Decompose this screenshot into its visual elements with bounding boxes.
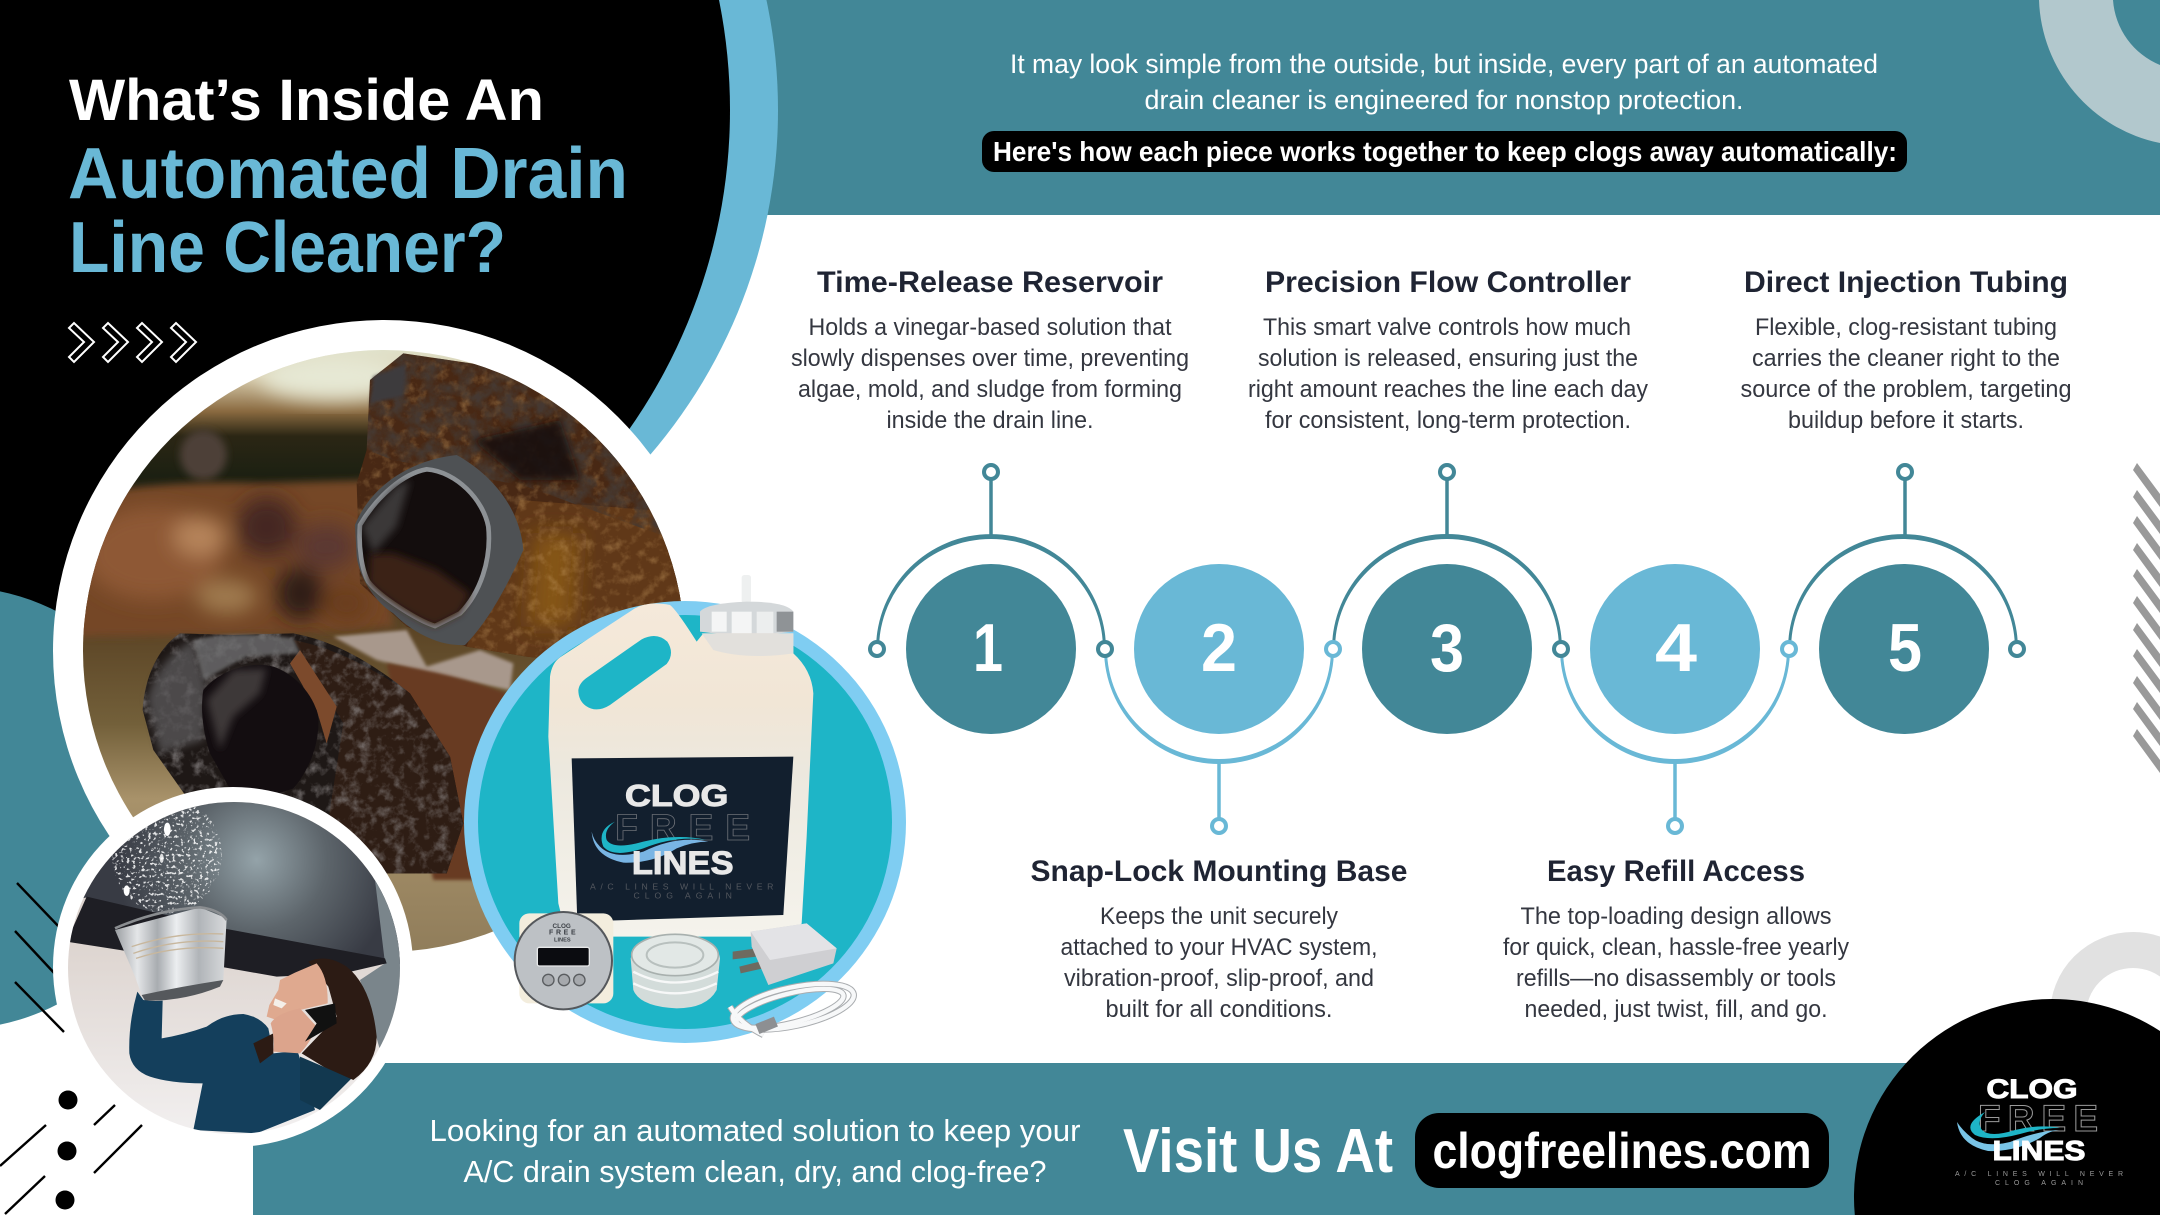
- jug body: [548, 604, 813, 937]
- step 5 node: 5: [1888, 610, 1922, 686]
- logo: Clog Free Lines: CLOG AGAIN: [1995, 1180, 2083, 1187]
- step 4 text: Easy Refill Access: [1503, 855, 1849, 1023]
- logo: Clog Free Lines: [1955, 1074, 2123, 1187]
- phone: [305, 1003, 337, 1042]
- intro line 2: drain cleaner is engineered for nonstop protection.: [1144, 85, 1744, 115]
- controller mount: [519, 913, 613, 1003]
- website pill: [1415, 1113, 1829, 1188]
- step 3 text: Precision Flow Controller: This smart valve controls how much: [1263, 314, 1631, 341]
- black logo circle: [1854, 999, 2160, 1215]
- step 4 text: Easy Refill Access: needed, just twist, fill, and go.: [1524, 996, 1828, 1023]
- question line 1: Looking for an automated solution to keep your: [430, 1113, 1080, 1148]
- intro highlight pill: Here's how each piece works together to keep clogs away automatically:: [993, 136, 1897, 167]
- junction dots: [870, 642, 2024, 656]
- question line 2: A/C drain system clean, dry, and clog-free?: [464, 1154, 1046, 1189]
- step 2 text: Snap-Lock Mounting Base: Keeps the unit securely: [1100, 903, 1338, 930]
- step 5 text: Direct Injection Tubing: source of the problem, targeting: [1740, 376, 2072, 403]
- adapter body: [751, 923, 837, 985]
- logo: Clog Free Lines: A/C LINES WILL NEVER: [1955, 1171, 2123, 1178]
- teal circle lower left: [0, 587, 177, 1029]
- slanted lines: [0, 1105, 142, 1214]
- controller dial: [515, 912, 612, 1009]
- product: solution jug with label: [548, 575, 813, 937]
- photo: rusted corroded pipes: [60, 340, 693, 960]
- smooth rear pipe: [386, 662, 506, 882]
- jug handle hole: [578, 636, 671, 709]
- controller logo: [549, 923, 576, 943]
- light blue arc behind black circle: [0, 0, 778, 639]
- lower pipe body: [143, 633, 463, 873]
- white ring of leak photo: [53, 787, 413, 1147]
- blurred horizontal pipe: [73, 480, 393, 637]
- step 3 text: Precision Flow Controller: Precision Flow Controller: [1265, 266, 1632, 299]
- step 1 text: Time-Release Reservoir: inside the drain line.: [886, 407, 1094, 434]
- step 4 text: Easy Refill Access: Easy Refill Access: [1547, 855, 1805, 888]
- logo: Clog Free Lines: FREE: [1978, 1098, 2098, 1139]
- upper pipe mouth: [355, 455, 523, 645]
- step 5 text: Direct Injection Tubing: carries the cleaner right to the: [1752, 345, 2060, 372]
- controller LCD: [537, 947, 589, 966]
- water droplets: [112, 797, 222, 913]
- step 3 node: 3: [1430, 610, 1464, 686]
- controller logo: FREE: [549, 930, 576, 937]
- step 2 text: Snap-Lock Mounting Base: built for all conditions.: [1106, 996, 1332, 1023]
- lower pipe mouth: [202, 665, 318, 807]
- title line 1: What’s Inside An: [69, 68, 544, 133]
- jug cap: [700, 602, 793, 635]
- title line 2: Automated Drain: [68, 134, 628, 214]
- step 4 text: Easy Refill Access: for quick, clean, hassle-free yearly: [1503, 934, 1849, 961]
- face: [267, 963, 328, 1020]
- step 5 text: Direct Injection Tubing: buildup before it starts.: [1788, 407, 2024, 434]
- decorative thin diagonal lines left: [15, 883, 64, 1032]
- bottom call-to-action band: [253, 1063, 2160, 1215]
- product: coil of clear tubing: [631, 933, 720, 1008]
- step 4 node: [1560, 564, 1790, 833]
- title line 3: Line Cleaner?: [69, 208, 506, 288]
- step 3 text: Precision Flow Controller: for consistent, long-term protection.: [1265, 407, 1631, 434]
- bottom-left dots and lines: [0, 1090, 142, 1214]
- step 2 text: Snap-Lock Mounting Base: vibration-proof, slip-proof, and: [1064, 965, 1374, 992]
- step 3 node: [1332, 465, 1562, 734]
- sleeve and sweater: [129, 992, 315, 1133]
- top intro text: [1010, 49, 1878, 115]
- upper pipe body: [357, 353, 693, 673]
- step 2 text: Snap-Lock Mounting Base: attached to your HVAC system,: [1060, 934, 1378, 961]
- hair: [302, 958, 377, 1080]
- jug logo: A/C LINES WILL NEVER: [590, 881, 773, 891]
- step 2 text: Snap-Lock Mounting Base: Snap-Lock Mounting Base: [1030, 855, 1408, 888]
- step 1 text: Time-Release Reservoir: algae, mold, and sludge from forming: [798, 376, 1182, 403]
- visit us at label: Visit Us At: [1123, 1117, 1393, 1186]
- white ring of pipes photo: [53, 320, 715, 982]
- beige patches between pipes: [333, 630, 513, 690]
- bucket: [115, 907, 227, 1000]
- bottom question text: [430, 1113, 1080, 1189]
- intro line 1: It may look simple from the outside, but inside, every part of an automated: [1010, 49, 1878, 79]
- jug logo: CLOG AGAIN: [633, 891, 732, 901]
- step 4 node: 4: [1655, 610, 1697, 686]
- product: USB power adapter: [733, 923, 837, 985]
- inner teal circle: [478, 615, 892, 1029]
- controller logo: LINES: [554, 937, 571, 943]
- logo: Clog Free Lines: LINES: [1992, 1135, 2086, 1166]
- step 2 node: [1104, 564, 1334, 833]
- jug logo: LINES: [632, 845, 733, 881]
- photo: woman catching ceiling leak with bucket: [68, 802, 400, 1134]
- icon: four outlined chevrons: [69, 323, 196, 362]
- adapter prongs: [733, 948, 763, 973]
- jug label: [572, 757, 793, 922]
- step 1 text: Time-Release Reservoir: slowly dispenses over time, preventing: [791, 345, 1189, 372]
- hand: [271, 1008, 317, 1053]
- jug logo: CLOG: [625, 779, 728, 813]
- decorative ring bottom right: [2068, 950, 2160, 1080]
- black title circle: [0, 0, 730, 666]
- logo: Clog Free Lines: CLOG: [1986, 1074, 2078, 1104]
- controller buttons: [543, 974, 585, 986]
- step 1 text: Time-Release Reservoir: Time-Release Reservoir: [817, 266, 1164, 299]
- outer light blue circle: [464, 601, 906, 1043]
- dots: [56, 1090, 78, 1210]
- step 5 text: Direct Injection Tubing: Direct Injection Tubing: [1744, 266, 2068, 299]
- step 2 node: 2: [1201, 610, 1237, 686]
- step diagram: numbered circles on a wave line: [870, 465, 2024, 833]
- title: [68, 68, 628, 288]
- jug logo: [590, 779, 773, 901]
- jug logo: FREE: [615, 806, 750, 848]
- product: digital controller: [515, 912, 613, 1009]
- top-right decorative ring: [2039, 0, 2160, 143]
- product: white USB cable: [729, 975, 858, 1038]
- top banner band: [700, 0, 2160, 215]
- product circle: [464, 601, 906, 1043]
- right side diagonal stripes: [2133, 463, 2160, 773]
- controller logo: CLOG: [553, 923, 571, 930]
- step 3 text: Precision Flow Controller: solution is released, ensuring just the: [1258, 345, 1638, 372]
- step 5 text: Direct Injection Tubing: Flexible, clog-resistant tubing: [1755, 314, 2057, 341]
- step 1 node: [876, 465, 1106, 734]
- step 5 node: [1788, 465, 2018, 734]
- step 1 node: 1: [973, 610, 1003, 686]
- step 3 text: Precision Flow Controller: [1248, 266, 1648, 434]
- website pill: clogfreelines.com: [1432, 1123, 1812, 1179]
- step 2 text: Snap-Lock Mounting Base: [1030, 855, 1408, 1023]
- step 3 text: Precision Flow Controller: right amount reaches the line each day: [1248, 376, 1648, 403]
- step 1 text: Time-Release Reservoir: [791, 266, 1189, 434]
- step 1 text: Time-Release Reservoir: Holds a vinegar-based solution that: [808, 314, 1172, 341]
- jug nozzle: [742, 575, 751, 603]
- step 5 text: Direct Injection Tubing: [1740, 266, 2072, 434]
- step 4 text: Easy Refill Access: The top-loading design allows: [1520, 903, 1832, 930]
- step 4 text: Easy Refill Access: refills—no disassembly or tools: [1516, 965, 1836, 992]
